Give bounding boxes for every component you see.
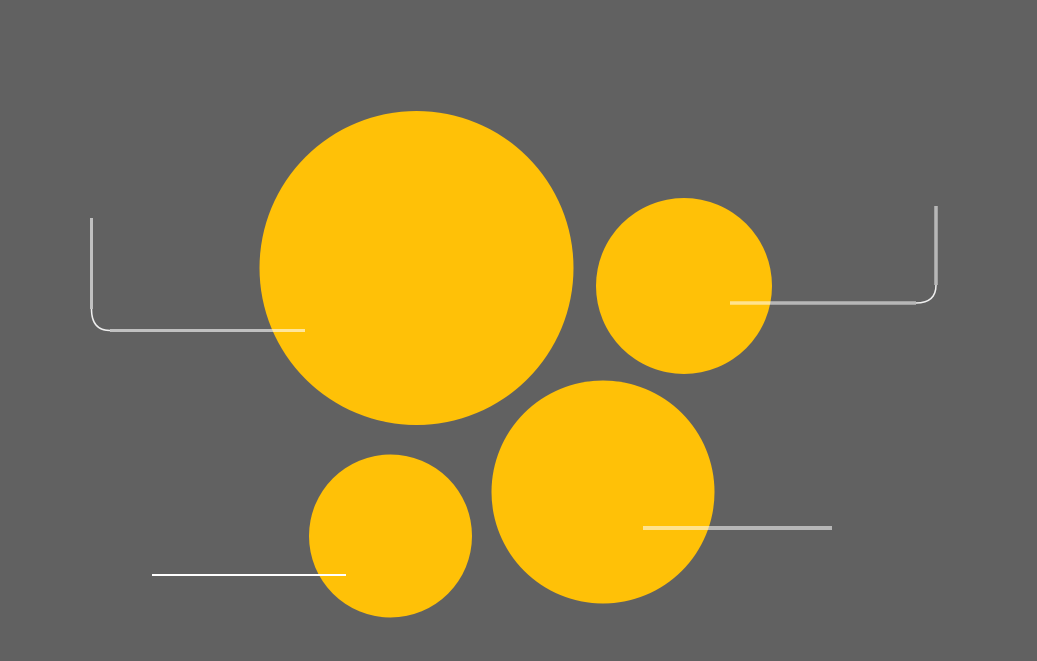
leader line: upper left (92, 218, 305, 330)
bubble: lower left (309, 454, 472, 618)
bubble: lower centre (492, 380, 714, 604)
leader line: lower right (643, 526, 832, 530)
bubble: upper right (596, 198, 772, 374)
leader line: lower left (152, 574, 346, 576)
bubble: largest (260, 111, 574, 425)
leader line: upper right (730, 206, 936, 303)
